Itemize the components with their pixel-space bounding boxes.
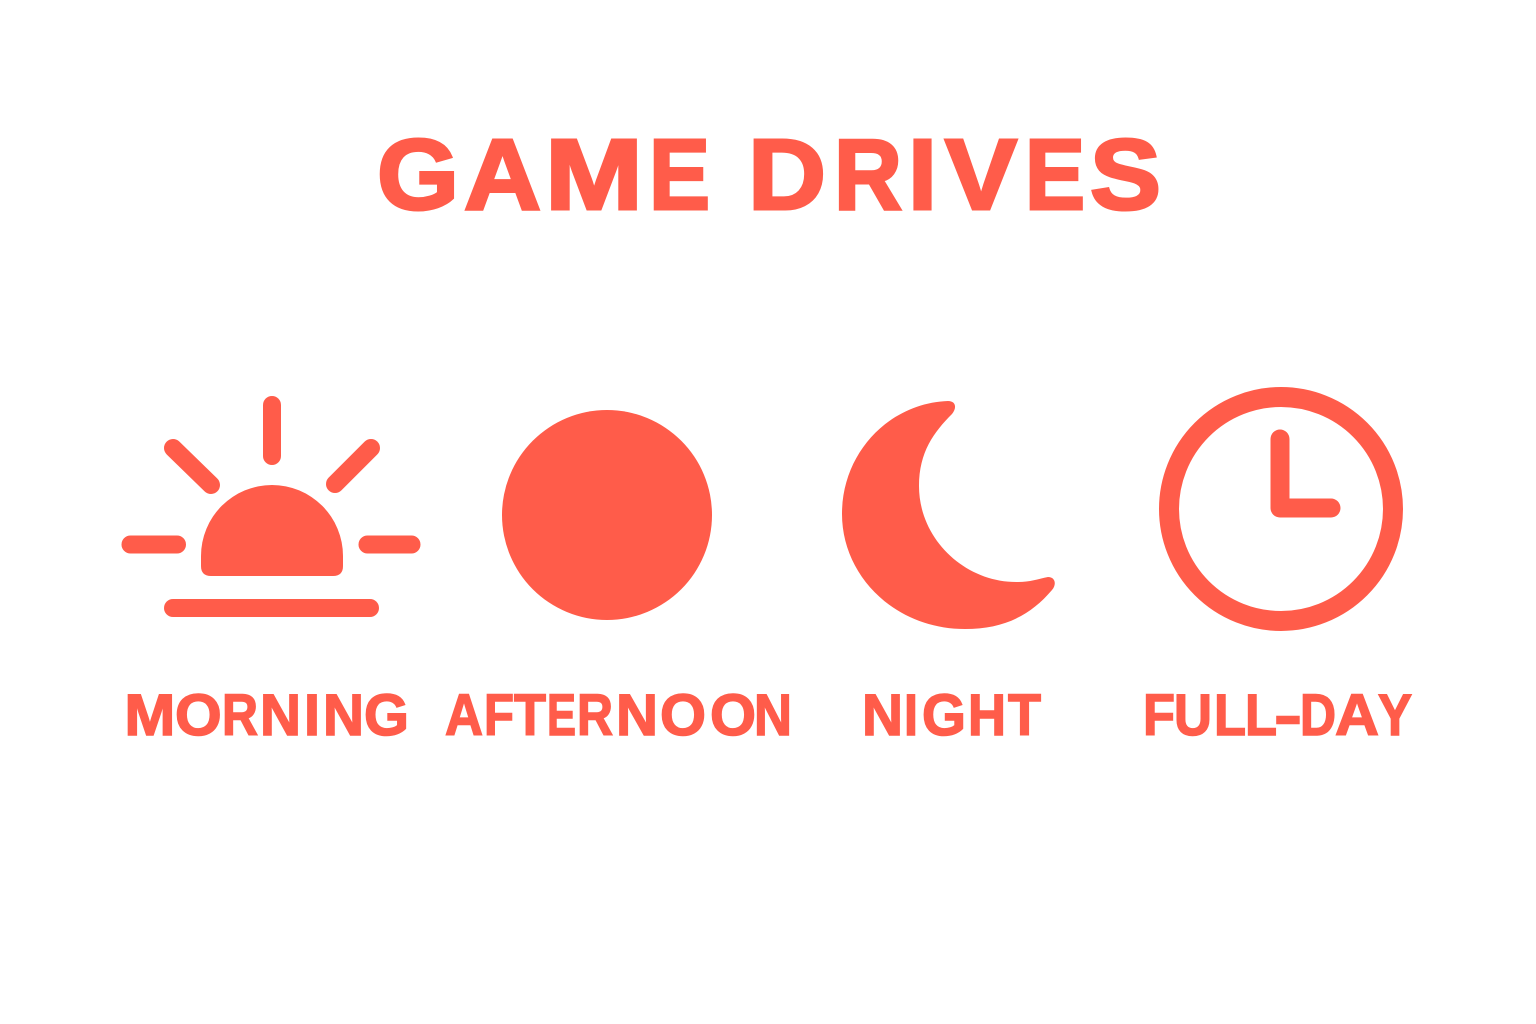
label: afternoon: A [445, 683, 483, 748]
label: full-day: U [1174, 683, 1212, 748]
icon: night crescent moon [842, 401, 1055, 629]
label: afternoon: E [547, 683, 576, 748]
label: morning: I [304, 683, 320, 748]
label: morning: N [260, 683, 301, 748]
label: afternoon: O [710, 683, 756, 748]
label: morning: M [124, 683, 175, 748]
icon: full-day clock [1169, 397, 1393, 621]
label: full-day: Y [1378, 683, 1412, 748]
label: night: I [904, 683, 918, 748]
label: night: H [968, 683, 1006, 748]
label: afternoon: N [754, 683, 792, 748]
title: G [377, 119, 459, 231]
icon: morning sunrise [130, 405, 412, 608]
label: afternoon: O [660, 683, 706, 748]
label: afternoon: R [577, 683, 613, 748]
label: night: G [922, 683, 966, 748]
title: E [1025, 119, 1085, 231]
label: afternoon: T [514, 683, 546, 748]
label: full-day: L [1214, 683, 1246, 748]
title: A [464, 119, 541, 231]
title: E [649, 119, 710, 231]
title: S [1090, 119, 1161, 231]
icon: afternoon sun [502, 410, 712, 620]
label: full-day: F [1143, 683, 1175, 748]
label: night: N [862, 683, 903, 748]
label: afternoon: N [616, 683, 658, 748]
label: night: T [1008, 683, 1041, 748]
label: morning: R [222, 683, 258, 748]
label: afternoon: F [484, 683, 514, 748]
label: full-day: - [1274, 683, 1302, 748]
title: V [945, 119, 1017, 231]
label: full-day: A [1335, 683, 1379, 748]
label: morning: O [175, 683, 222, 748]
label: morning: G [364, 683, 409, 748]
label: morning: N [323, 683, 364, 748]
title: I [908, 119, 937, 231]
title: D [748, 119, 826, 231]
title: R [834, 119, 902, 231]
label: full-day: D [1300, 683, 1336, 748]
title: M [545, 119, 643, 231]
label: full-day: L [1245, 683, 1277, 748]
